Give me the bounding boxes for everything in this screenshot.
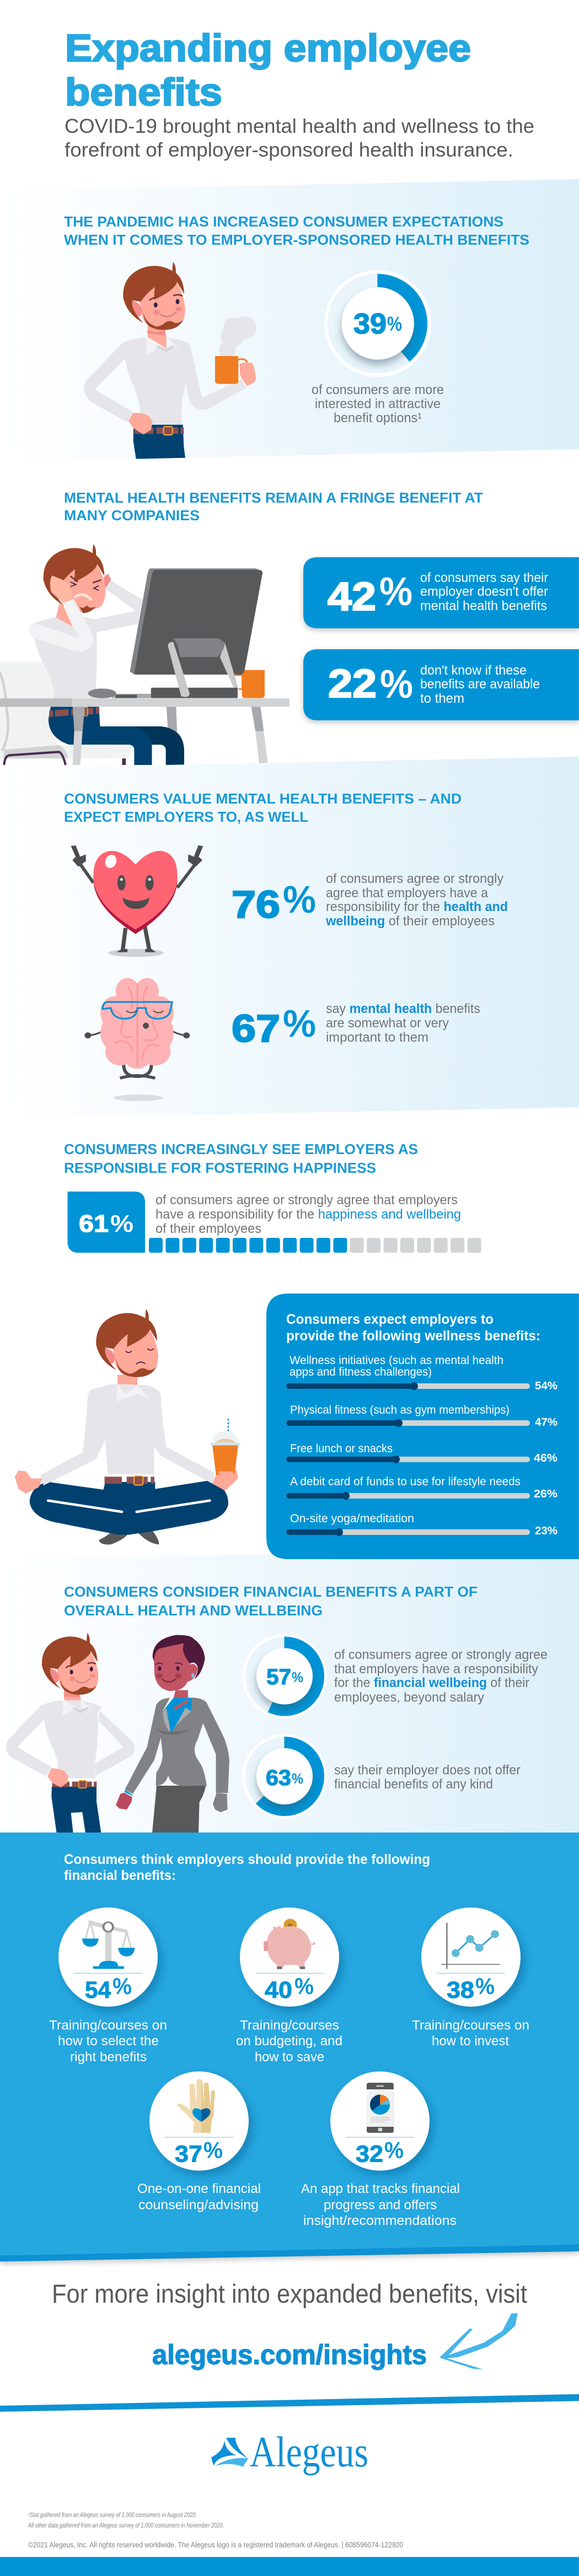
callout: 42% [303, 557, 579, 628]
item: 32% app [301, 2071, 460, 2228]
text: 76% description: agree that employers have a [326, 886, 489, 901]
text: 76% description [325, 871, 508, 929]
heading: financial benefits: CONSUMERS CONSIDER FINANCIAL BENEFITS A PART OF [64, 1583, 478, 1600]
title [65, 26, 471, 114]
item: 38% invest: how to invest [432, 2034, 509, 2049]
heading: wellness benefits: Consumers expect employers to [286, 1312, 494, 1327]
stat: 76% [232, 878, 316, 926]
icon: scales [82, 1920, 135, 1969]
text: 67% description: say mental health benefits [326, 1001, 480, 1016]
bar: physical fitness 47%: 47% [535, 1416, 557, 1429]
text: 39% caption: of consumers are more [312, 382, 444, 397]
item: 38% invest [412, 1907, 529, 2049]
bar: physical fitness 47% [286, 1404, 557, 1429]
callout: 22%: benefits are available [420, 677, 540, 692]
item: 37% counseling: counseling/advising [138, 2198, 259, 2212]
item: 40% budgeting: how to save [255, 2050, 324, 2065]
item: 40% budgeting: % [294, 1973, 314, 1999]
illustration: man holding coffee [84, 262, 256, 459]
item: 32% app: % [384, 2137, 404, 2163]
text: 67% description: important to them [326, 1030, 428, 1045]
heading: pandemic expectations [64, 213, 529, 248]
item: 38% invest: % [475, 1973, 495, 1999]
text: 63% description: financial benefits of any kind [334, 1777, 493, 1792]
item: 54% select benefits: right benefits [70, 2050, 147, 2065]
heading: fringe benefit: MENTAL HEALTH BENEFITS REMAIN A FRINGE BENEFIT AT [64, 489, 483, 506]
item: 40% budgeting: on budgeting, and [236, 2034, 342, 2049]
item: 32% app: 32 [356, 2141, 383, 2167]
chart: 61% pictogram bar [149, 1238, 481, 1253]
text: 57% description: that employers have a responsibility [334, 1662, 538, 1677]
text: 57% description: employees, beyond salary [334, 1690, 484, 1705]
text: 39% caption: benefit options¹ [334, 411, 422, 425]
text: 39% caption: interested in attractive [315, 397, 441, 411]
panel: pandemic expectations [0, 179, 579, 462]
bar: yoga 23% [286, 1512, 557, 1537]
callout: 42%: mental health benefits [420, 599, 547, 613]
heading: fostering happiness: RESPONSIBLE FOR FOSTERING HAPPINESS [64, 1160, 376, 1176]
text: 61% description: of consumers agree or strongly agree that employers [156, 1193, 458, 1208]
bar: wellness initiatives 54% [286, 1354, 557, 1392]
bar: free lunch 46%: 46% [534, 1452, 557, 1464]
call to action link: alegeus.com/insights [152, 2339, 427, 2370]
panel: financial benefits list [0, 1833, 579, 2262]
stat: 76%: % [283, 878, 316, 921]
heading: financial benefits: OVERALL HEALTH AND WELLBEING [64, 1602, 323, 1619]
donut: 39%: % [387, 312, 402, 335]
panel: wellness benefits list [266, 1294, 579, 1559]
callout: 42%: 42 [328, 575, 376, 619]
copyright: ©2021 Alegeus, Inc. All rights reserved worldwide. The Alegeus logo is a registered trademark of Alegeus. | 608596074-122920 [28, 2541, 403, 2549]
text: 67% description [326, 1001, 480, 1045]
footnotes [28, 2512, 224, 2529]
title: Expanding employee [65, 26, 471, 69]
subtitle [65, 115, 534, 161]
text: 63% description: say their employer does not offer [334, 1763, 521, 1778]
item: 32% app: insight/recommendations [303, 2213, 457, 2228]
donut: 63%: % [292, 1770, 303, 1787]
donut: 63% [244, 1736, 325, 1817]
illustration: stressed man at desk [0, 544, 290, 765]
text: 39% caption [312, 382, 444, 425]
icon: line chart [441, 1923, 500, 1969]
item: 32% app: progress and offers [324, 2198, 437, 2212]
illustration: meditating man with drink [15, 1309, 240, 1545]
donut: 57%: % [292, 1669, 303, 1685]
illustration: man and woman talking [6, 1633, 229, 1833]
callout: 22%: 22 [328, 662, 377, 706]
heading: fringe benefit [64, 489, 483, 524]
item: 37% counseling: % [203, 2137, 223, 2163]
text: 61% description: of their employees [156, 1221, 261, 1236]
logo: Alegeus [211, 2428, 368, 2476]
stat: 67% [232, 1002, 316, 1050]
text: 57% description: for the financial wellbeing of their [334, 1675, 529, 1690]
stat: 67%: 67 [232, 1007, 280, 1050]
item: 38% invest: Training/courses on [412, 2018, 529, 2033]
heading: pandemic expectations: WHEN IT COMES TO EMPLOYER-SPONSORED HEALTH BENEFITS [64, 231, 529, 248]
item: 54% select benefits: % [112, 1973, 132, 1999]
donut: 57%: 57 [266, 1665, 291, 1689]
bar: debit card 26%: A debit card of funds to use for lifestyle needs [290, 1475, 521, 1488]
heading: financial benefits [64, 1583, 478, 1619]
text: 67% description: are somewhat or very [326, 1016, 449, 1031]
text: 57% description: of consumers agree or strongly agree [334, 1647, 548, 1662]
subtitle: COVID-19 brought mental health and wellness to the [65, 115, 534, 137]
icon: meditating brain [84, 978, 190, 1101]
callout: 42%: of consumers say their [420, 570, 548, 585]
heading: fostering happiness [64, 1141, 418, 1176]
stat: 76%: 76 [232, 883, 280, 926]
icon: piggy bank [264, 1919, 314, 1969]
heading: value mental health: CONSUMERS VALUE MENTAL HEALTH BENEFITS – AND [64, 790, 462, 807]
donut: 39%: 39 [353, 308, 387, 340]
bar: wellness initiatives 54%: Wellness initiatives (such as mental health [290, 1354, 503, 1367]
icon: hand with heart [176, 2079, 215, 2133]
heading: value mental health: EXPECT EMPLOYERS TO, AS WELL [64, 809, 308, 825]
bar: free lunch 46%: Free lunch or snacks [290, 1442, 393, 1455]
icon: smiling heart [71, 845, 203, 957]
item: 38% invest: 38 [447, 1977, 474, 2003]
text: 76% description: wellbeing of their employees [325, 914, 495, 929]
bar: wellness initiatives 54%: apps and fitness challenges) [290, 1366, 432, 1378]
callout: 22% [303, 649, 579, 720]
title: benefits [65, 71, 222, 114]
panel: consumers value mental health [0, 757, 579, 1119]
item: 54% select benefits: 54 [85, 1977, 111, 2003]
text: 76% description: responsibility for the health and [326, 899, 508, 914]
stat: 67%: % [283, 1002, 316, 1045]
subtitle: forefront of employer-sponsored health insurance. [65, 138, 513, 161]
donut: 63%: 63 [266, 1766, 291, 1790]
callout: 22%: to them [420, 691, 464, 706]
bar: yoga 23%: On-site yoga/meditation [290, 1512, 414, 1525]
callout: 22%: don't know if these [420, 663, 527, 678]
heading: fringe benefit: MANY COMPANIES [64, 507, 200, 524]
item: 40% budgeting: Training/courses [240, 2018, 339, 2033]
bar: yoga 23%: 23% [535, 1525, 557, 1537]
item: 37% counseling: 37 [175, 2141, 202, 2167]
footnotes: All other data gathered from an Alegeus survey of 1,000 consumers in November 2020. [28, 2523, 224, 2529]
heading: wellness benefits: provide the following wellness benefits: [286, 1328, 540, 1344]
panel: financial benefits background [0, 1550, 579, 1835]
text: 76% description: of consumers agree or strongly [326, 871, 503, 886]
bar: physical fitness 47%: Physical fitness (such as gym memberships) [290, 1404, 510, 1416]
icon: piggy bank: $ [288, 1922, 293, 1930]
icon: phone with pie chart [367, 2083, 394, 2133]
call to action text: For more insight into expanded benefits, visit [52, 2279, 527, 2308]
text: 63% description [334, 1763, 521, 1792]
callout: 42%: employer doesn't offer [420, 584, 548, 599]
stat box: 61%: % [110, 1210, 133, 1237]
bar: debit card 26%: 26% [534, 1488, 557, 1500]
arrow pointing at link [439, 2313, 518, 2369]
heading: financial benefits list: financial benefits: [64, 1868, 176, 1883]
item: 54% select benefits: how to select the [58, 2034, 159, 2049]
footer bar [0, 2557, 579, 2576]
callout: 22%: % [380, 662, 413, 707]
item: 54% select benefits [49, 1907, 167, 2065]
item: 37% counseling: One-on-one financial [137, 2181, 261, 2196]
text: 57% description [334, 1647, 548, 1705]
text: 61% description [156, 1193, 461, 1236]
stat box: 61% [67, 1192, 145, 1253]
text: 61% description: have a responsibility for the happiness and wellbeing [156, 1207, 461, 1222]
item: 40% budgeting [236, 1907, 342, 2065]
heading: wellness benefits [286, 1312, 540, 1344]
heading: value mental health [64, 790, 462, 825]
donut: 39% [326, 272, 430, 375]
callout: 42%: % [379, 570, 412, 614]
item: 37% counseling [137, 2071, 261, 2212]
heading: fostering happiness: CONSUMERS INCREASINGLY SEE EMPLOYERS AS [64, 1141, 418, 1157]
item: 54% select benefits: Training/courses on [49, 2018, 167, 2033]
heading: financial benefits list [64, 1852, 430, 1883]
stat box: 61%: 61 [79, 1210, 109, 1237]
heading: pandemic expectations: THE PANDEMIC HAS INCREASED CONSUMER EXPECTATIONS [64, 213, 503, 230]
footnotes: ¹Stat gathered from an Alegeus survey of 1,000 consumers in August 2020. [28, 2512, 197, 2519]
bar: debit card 26% [286, 1475, 557, 1500]
item: 40% budgeting: 40 [265, 1977, 292, 2003]
divider stripe [0, 2394, 579, 2412]
bar: wellness initiatives 54%: 54% [535, 1380, 557, 1392]
heading: financial benefits list: Consumers think employers should provide the following [64, 1852, 430, 1867]
bar: free lunch 46% [286, 1442, 557, 1464]
item: 32% app: An app that tracks financial [301, 2181, 460, 2196]
logo: Alegeus: Alegeus [250, 2428, 368, 2476]
donut: 57% [244, 1636, 325, 1717]
